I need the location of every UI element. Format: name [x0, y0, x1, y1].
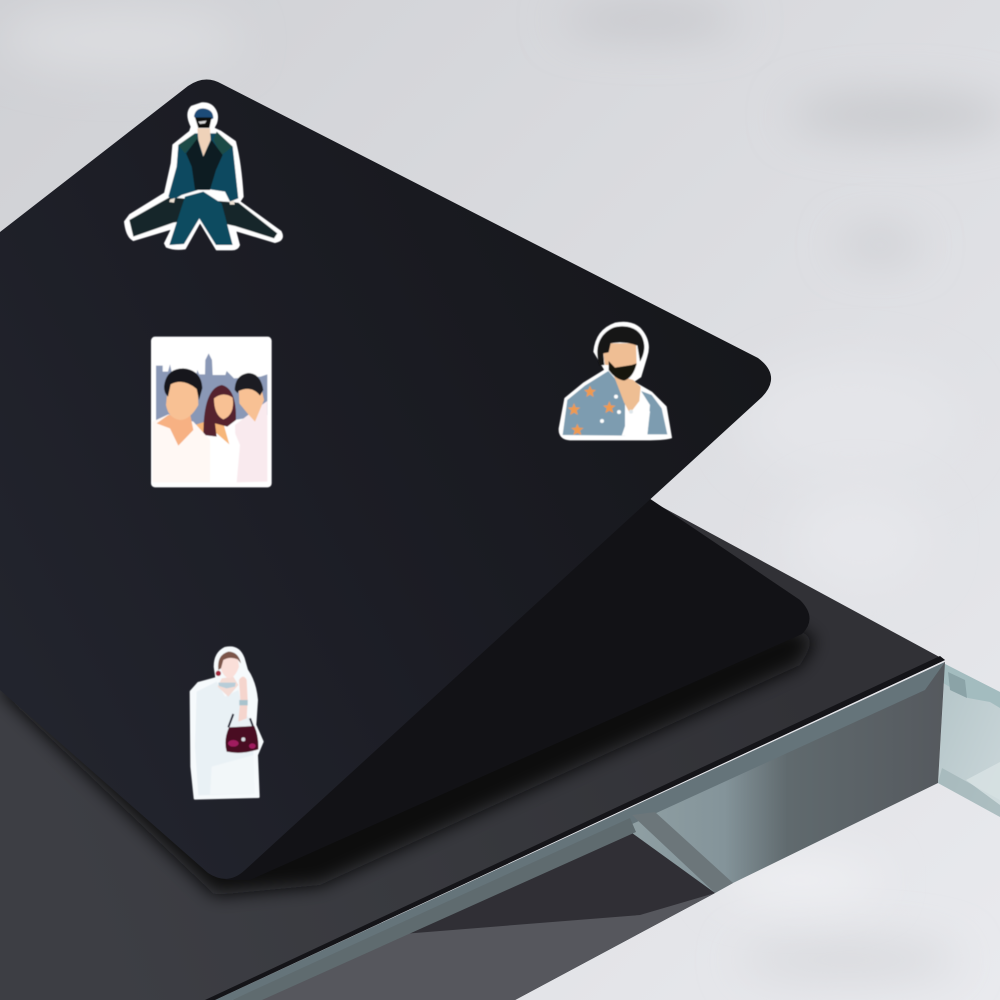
face and hair: [220, 655, 239, 678]
necklace and bangles: [218, 683, 236, 688]
table top dark surface: [0, 495, 945, 1000]
sticker: three friends photo: [151, 337, 272, 487]
face: [608, 343, 637, 375]
skin and neck: [218, 677, 238, 697]
white saree: [195, 682, 254, 795]
glass table front edge: [215, 662, 945, 1000]
city skyline: [156, 353, 267, 427]
handbag: [225, 714, 258, 753]
orange stars: [584, 386, 596, 397]
skin: [613, 374, 641, 413]
glass table leg: [935, 664, 1000, 817]
sticker: caped hero: [125, 103, 282, 249]
white vest: [622, 387, 650, 436]
laptop lid: [0, 79, 771, 879]
laptop base: [225, 492, 810, 880]
jacket buttons: [614, 395, 618, 399]
friend right: [235, 373, 267, 482]
friend left: [153, 368, 210, 482]
friend middle: [193, 385, 240, 482]
sticker: man in star denim jacket: [559, 322, 671, 440]
hair and beard: [597, 326, 644, 366]
denim jacket: [563, 371, 625, 436]
sticker: woman in white with handbag: [191, 648, 262, 798]
laptop shadow on table: [0, 625, 815, 895]
